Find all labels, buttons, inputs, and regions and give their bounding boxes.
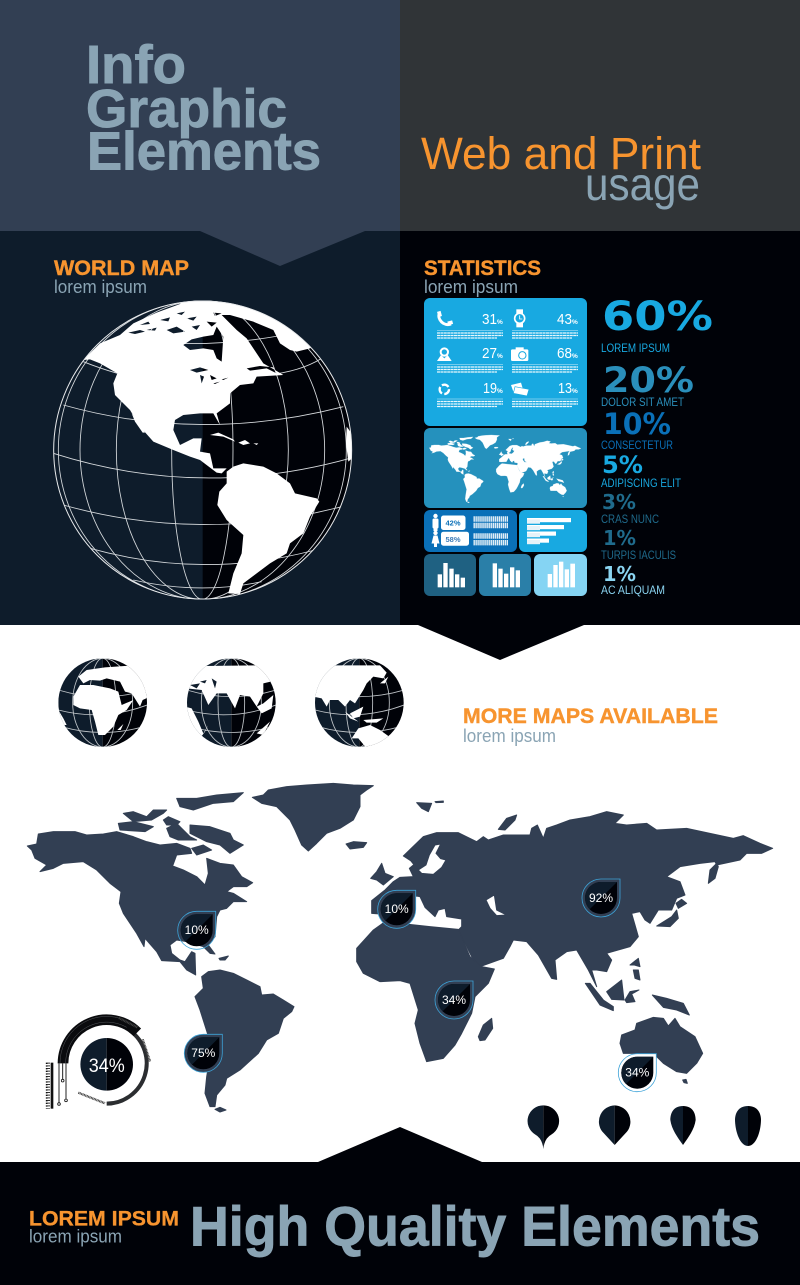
values: 31 <box>482 311 497 328</box>
pin shape 4 <box>735 1106 761 1146</box>
percentage list: 5% <box>602 451 643 479</box>
pin shape 2 <box>599 1105 630 1145</box>
heading: world map: WORLD MAP <box>54 257 189 280</box>
arrow: statistics tab <box>418 625 584 660</box>
percentage list: 60% <box>602 294 713 340</box>
radial gauge: 34% <box>47 1016 150 1109</box>
small globes <box>58 657 404 748</box>
map pin: 10% north america <box>178 911 216 949</box>
values: % <box>572 353 578 360</box>
values: 19 <box>483 380 497 397</box>
subtitle: Web and Print: Web and Print <box>421 128 701 179</box>
icons <box>437 309 529 396</box>
values: % <box>572 388 578 395</box>
values: 27 <box>482 345 497 362</box>
card: bar chart light <box>534 554 587 596</box>
globe: Americas <box>53 280 354 600</box>
title: Info Graphic Elements: Info <box>86 35 186 95</box>
card: population share: 42% <box>446 518 461 528</box>
pin shape 1 <box>528 1105 559 1149</box>
percentage list: 1% <box>603 562 636 586</box>
map pin: 92% asia: 92% <box>589 891 613 905</box>
large world map <box>27 783 773 1112</box>
heading: more maps available: MORE MAPS AVAILABLE <box>463 705 718 728</box>
card: horizontal bars <box>519 510 587 552</box>
globe: Asia <box>185 657 278 747</box>
map pin: 92% asia <box>582 879 620 917</box>
map pin: 34% africa <box>435 981 473 1019</box>
percentage list: CRAS NUNC <box>601 514 659 526</box>
map pin: 34% africa: 34% <box>442 993 466 1007</box>
person icons <box>432 514 469 547</box>
footer heading: lorem ipsum: LOREM IPSUM <box>29 1207 179 1231</box>
panel: white maps section <box>0 625 800 1162</box>
subheading: lorem ipsum: lorem ipsum <box>463 726 556 746</box>
title: Info Graphic Elements: Graphic <box>86 79 287 139</box>
percentage list: 20% <box>603 361 694 401</box>
values: % <box>497 388 503 395</box>
map pin: 75% south america <box>184 1034 222 1072</box>
panel: statistics <box>400 231 800 625</box>
values: % <box>572 319 578 326</box>
map pin: 10% europe <box>378 890 416 928</box>
arrow: header tab <box>200 231 365 266</box>
percentage list <box>601 294 713 597</box>
card: bar chart dark <box>424 554 476 596</box>
card: population share <box>424 510 517 552</box>
values <box>482 311 578 397</box>
card: bar chart medium <box>479 554 531 596</box>
map pin: 75% south america: 75% <box>191 1046 216 1060</box>
percentage list: DOLOR SIT AMET <box>601 397 684 409</box>
percentage list: ADIPISCING ELIT <box>601 478 681 490</box>
map pin: 34% australia: 34% <box>625 1065 650 1079</box>
globe: Australia <box>313 657 404 748</box>
values: 68 <box>557 345 572 362</box>
globe: Africa <box>58 658 150 747</box>
card: population share: 58% <box>446 535 461 544</box>
map pin: 34% australia <box>618 1054 656 1092</box>
percentage list: 10% <box>603 407 671 441</box>
title: Info Graphic Elements: Elements <box>87 122 321 182</box>
percentage list: AC ALIQUAM <box>601 585 665 597</box>
heading: statistics: STATISTICS <box>424 257 541 280</box>
percentage list: 1% <box>603 526 636 550</box>
arrow: footer tab <box>318 1127 482 1162</box>
panel: footer <box>0 1127 800 1285</box>
percentage list: LOREM IPSUM <box>601 343 670 355</box>
subtitle: usage: usage <box>585 158 700 210</box>
percentage list: TURPIS IACULIS <box>601 550 676 562</box>
values: % <box>497 353 503 360</box>
percentage list: 3% <box>602 490 636 514</box>
subheading: lorem ipsum: lorem ipsum <box>424 277 518 297</box>
map pin: 10% north america: 10% <box>185 923 209 937</box>
values: 13 <box>558 380 572 397</box>
footer subheading: lorem ipsum <box>29 1227 122 1247</box>
footer title: High Quality Elements <box>190 1195 760 1258</box>
pin shape 3 <box>670 1106 696 1145</box>
percentage list: CONSECTETUR <box>601 440 673 452</box>
values: 43 <box>557 311 572 328</box>
values: % <box>497 319 503 326</box>
panel: world map <box>0 231 400 625</box>
header panel: title <box>0 0 400 231</box>
header panel: web and print usage <box>400 0 800 231</box>
map pin: 10% europe: 10% <box>385 902 409 916</box>
icons: map pin set <box>528 1105 761 1149</box>
card: mini world map <box>424 428 587 508</box>
title: Info Graphic Elements <box>86 35 321 182</box>
card: icon statistics <box>424 298 587 426</box>
radial gauge: 34%: 34% <box>89 1056 125 1077</box>
subheading: lorem ipsum: lorem ipsum <box>54 277 147 297</box>
